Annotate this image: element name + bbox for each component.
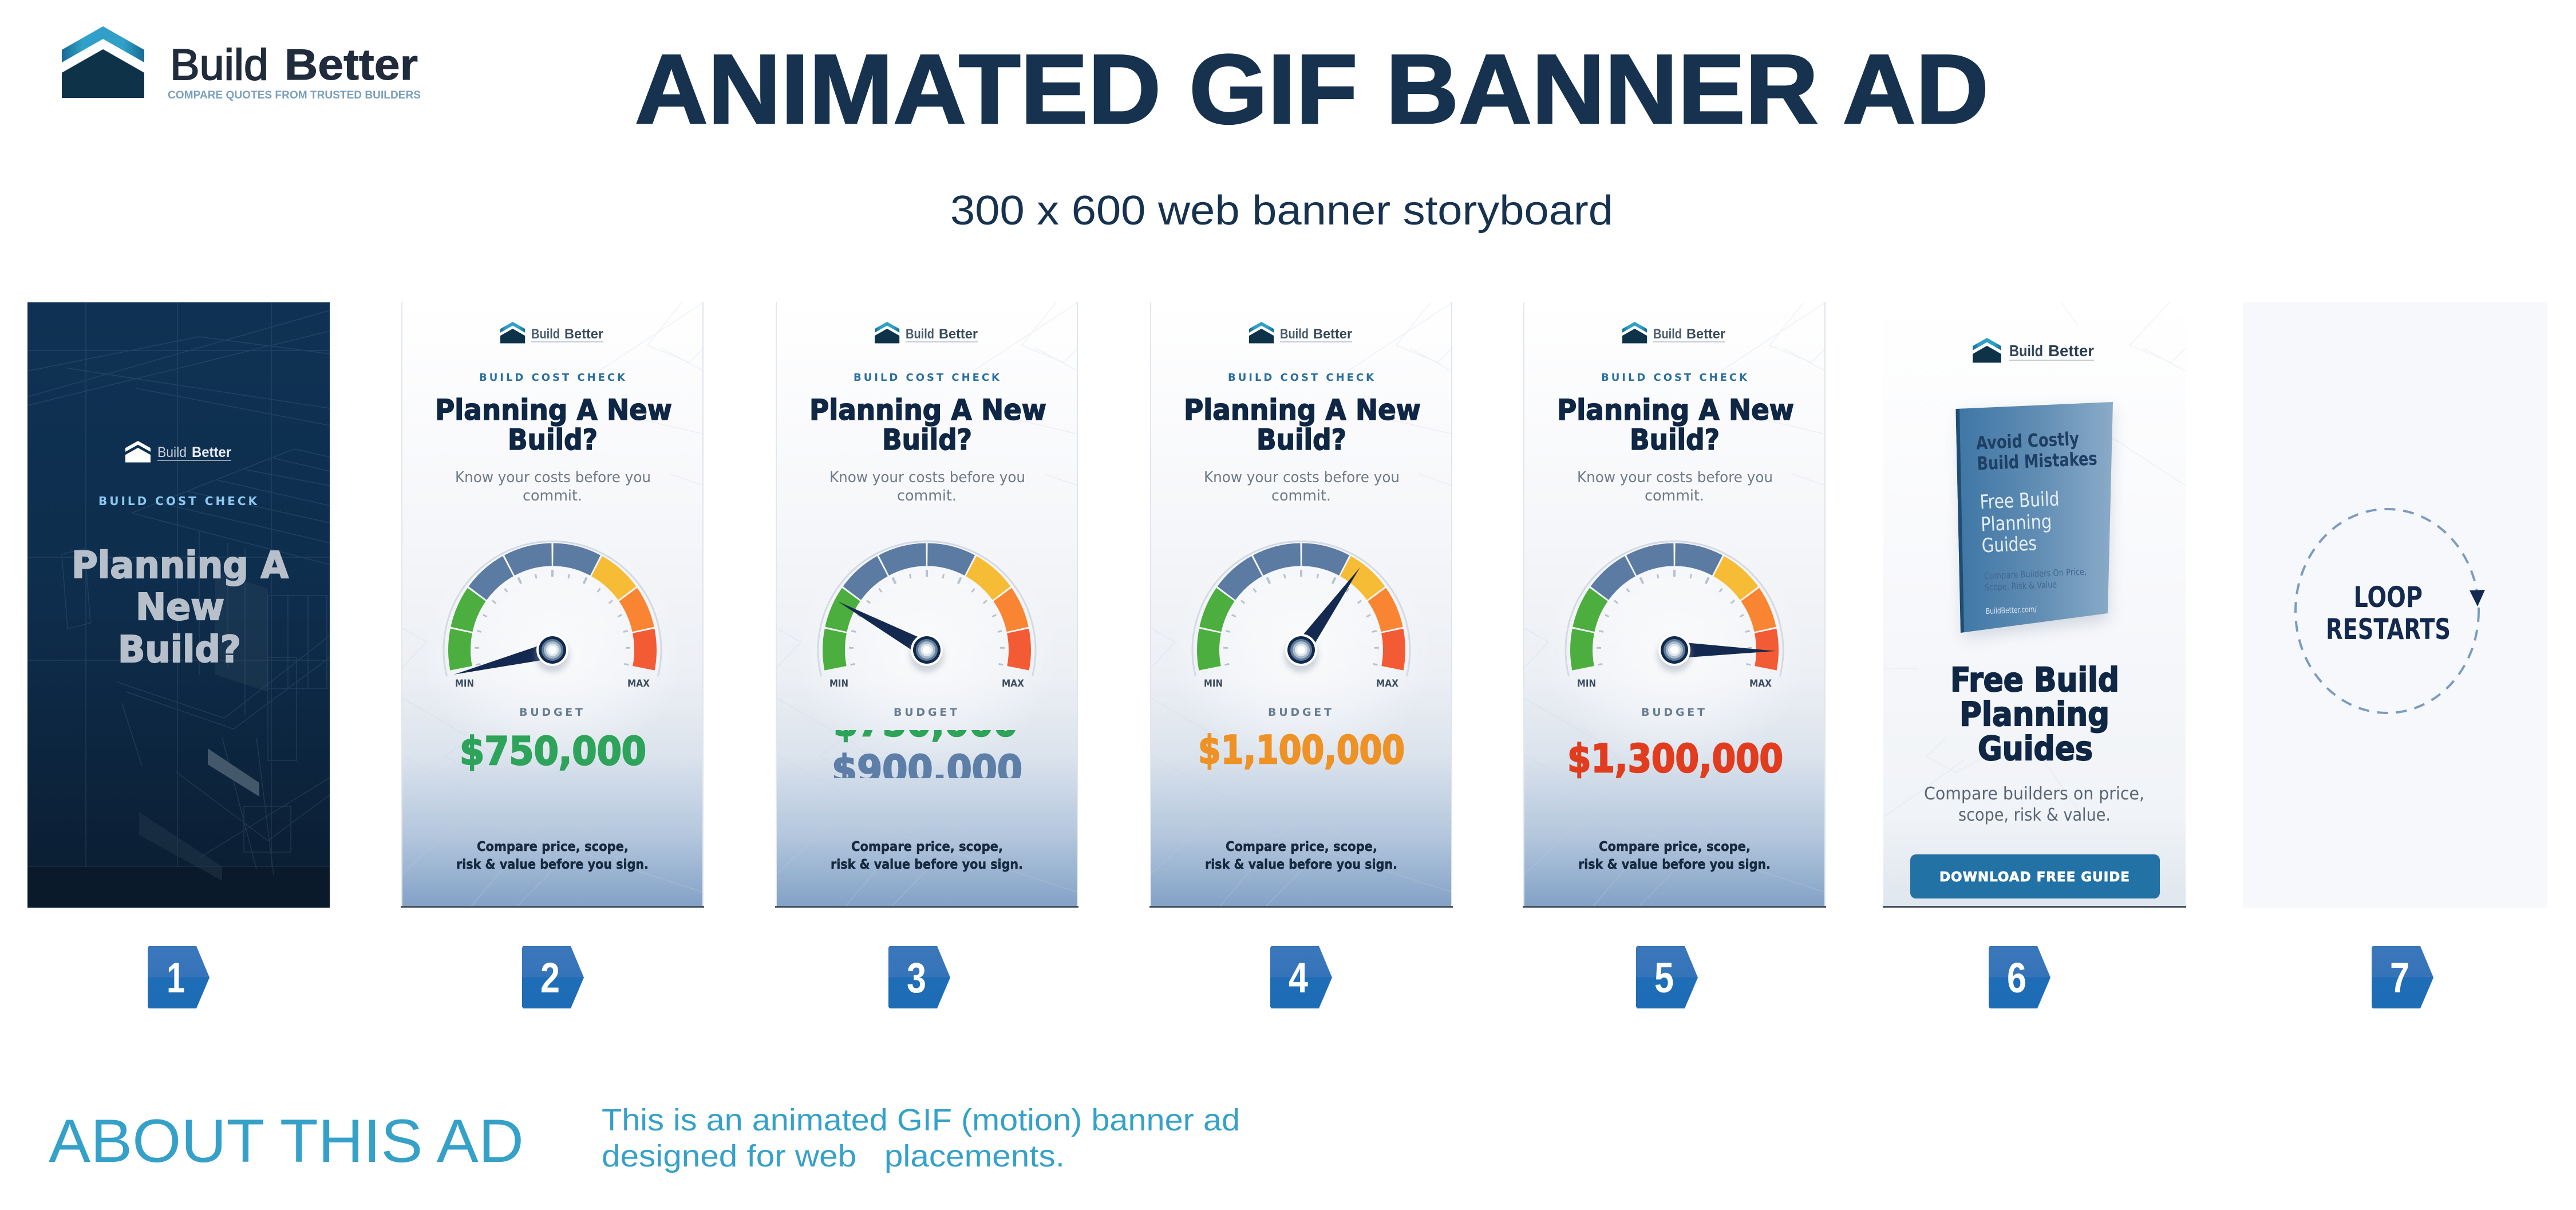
title: ANIMATED GIF BANNER AD [635,34,1989,144]
logo: Build [1280,326,1309,342]
gauge: MIN [1577,678,1596,689]
panel background [775,302,1078,908]
logo wordmark: Better [285,41,418,89]
logo [1622,322,1725,344]
subhead [455,469,651,505]
logo: Build Better [62,26,421,101]
about heading: ABOUT THIS AD [49,1106,524,1175]
footer copy [831,839,1023,872]
panel 7: loop restarts [2243,302,2547,908]
panel 6: free guides call to action [1883,302,2186,908]
footer copy: risk & value before you sign. [1578,857,1771,872]
logo [1249,322,1352,344]
headline: Planning A New [435,393,672,427]
logo: Better [1313,326,1352,342]
headline [1184,393,1421,456]
headline: Build? [118,629,241,671]
book: planning guide: Build Mistakes [1977,448,2097,475]
panel 5: gauge at $1,300,000 [1523,302,1826,908]
book: planning guide: BuildBetter.com/ [1986,605,2037,616]
button: download free guide: DOWNLOAD FREE GUIDE [1939,870,2129,885]
logo [875,322,978,344]
footer copy: Compare price, scope, [851,839,1003,854]
gauge [818,541,1036,689]
headline [809,393,1046,456]
headline: Free Build [1950,660,2119,699]
logo: white: Build [157,444,187,460]
step badge 3: 3 [907,954,926,1002]
step badge 4: 4 [1289,954,1308,1002]
logo [1973,338,2094,362]
step badge 2: 2 [540,954,560,1002]
headline: Planning A [72,545,289,587]
rolling budget values [833,730,1021,778]
headline: New [136,586,224,629]
headline: Planning A New [1557,393,1794,427]
panel background [2243,302,2547,908]
budget value: $750,000 [460,729,646,774]
budget value: $1,100,000 [1198,728,1405,773]
step badge 5: 5 [1654,954,1674,1002]
logo [500,322,603,344]
subhead [1924,784,2144,825]
panel background [401,302,704,908]
step badge 4 [1270,946,1332,1008]
subhead: Know your costs before you [1204,469,1400,486]
subhead: commit. [523,487,582,505]
subhead [1577,469,1773,505]
about description: This is an animated GIF (motion) banner ad [602,1103,1240,1137]
loop text: LOOP [2354,581,2423,614]
loop text [2326,581,2451,646]
panel 1: dark intro frame [27,302,330,908]
logo: Build [531,326,560,342]
headline: Build? [1257,423,1346,456]
logo: Better [2048,342,2094,360]
footer copy [456,839,649,872]
headline: Planning A New [1184,393,1421,427]
subhead: Know your costs before you [1577,469,1773,486]
subhead: commit. [1271,487,1331,505]
icon: house mark [62,26,144,98]
book: planning guide: Avoid Costly [1976,428,2080,454]
headline [72,545,289,671]
gauge: MAX [1002,678,1024,689]
logo: Better [939,326,978,342]
step badge 7 [2372,946,2433,1008]
panel background [1523,302,1826,908]
subhead [829,469,1025,505]
logo: white: Better [192,444,231,460]
logo: Better [564,326,603,342]
panel 3: gauge with rolling budget to $900,000 [775,302,1078,908]
logo wordmark: Build [170,41,268,89]
rolling budget values: $750,000 [833,700,1018,746]
footer copy: risk & value before you sign. [1205,857,1397,872]
gauge: MIN [455,678,474,689]
budget label: BUDGET [1268,706,1332,719]
step badge 7: 7 [2390,954,2409,1002]
logo tagline: COMPARE QUOTES FROM TRUSTED BUILDERS [168,89,421,101]
headline: Planning [1959,695,2109,734]
footer copy: Compare price, scope, [477,839,629,854]
button: download free guide [1910,854,2160,898]
headline [1557,393,1794,456]
headline [1950,660,2119,768]
subhead: Compare builders on price, [1924,784,2144,804]
footer copy: Compare price, scope, [1226,839,1377,854]
gauge: MIN [829,678,848,689]
step badge 1: 1 [167,954,185,1002]
book: planning guide: Free Build [1980,487,2060,514]
gauge [1192,541,1410,689]
panel 2: gauge at $750,000 [401,302,704,908]
logo wordmark [170,41,418,89]
eyebrow: BUILD COST CHECK [98,494,258,508]
rolling budget values: $900,000 [832,747,1022,793]
footer copy: risk & value before you sign. [831,857,1023,872]
budget label: BUDGET [519,706,583,719]
gauge [444,541,661,689]
about description: designed for web placements. [602,1139,1065,1173]
step badge 5 [1636,946,1698,1008]
gauge: MAX [1749,678,1772,689]
loop text: RESTARTS [2326,613,2451,646]
subhead: commit. [897,487,957,505]
footer copy: Compare price, scope, [1599,839,1751,854]
subhead: Know your costs before you [829,469,1025,486]
dashed loop circle [2296,509,2479,713]
gauge: MAX [627,678,650,689]
panel background [1149,302,1453,908]
headline: Planning A New [809,393,1046,427]
panel 4: gauge at $1,100,000 [1149,302,1453,908]
budget label: BUDGET [1641,706,1705,719]
budget label: BUDGET [894,706,957,719]
logo: Better [1686,326,1725,342]
headline: Guides [1978,729,2093,768]
step badge 6 [1989,946,2050,1008]
logo: Build [906,326,934,342]
book: planning guide: Scope, Risk & Value [1985,579,2057,593]
eyebrow: BUILD COST CHECK [854,372,1000,384]
step badge 1 [148,946,210,1008]
gauge: MAX [1376,678,1398,689]
headline [435,393,672,456]
headline: Build? [882,423,972,456]
budget value: $1,300,000 [1567,736,1783,782]
subhead [1204,469,1400,505]
footer copy: risk & value before you sign. [456,857,649,872]
gauge [1566,541,1783,689]
subtitle: 300 x 600 web banner storyboard [950,188,1613,234]
book: planning guide [1955,402,2113,637]
eyebrow: BUILD COST CHECK [1601,372,1748,384]
book: planning guide: Compare Builders On Price, [1984,566,2087,581]
logo: white [125,441,231,463]
logo: Build [2009,342,2043,360]
footer copy [1578,839,1771,872]
logo: Build [1653,326,1682,342]
step badge 2 [522,946,584,1008]
subhead: scope, risk & value. [1958,805,2111,825]
arrow head [2470,590,2485,606]
gauge: MIN [1204,678,1223,689]
book: planning guide: Planning [1980,510,2052,536]
footer copy [1205,839,1397,872]
eyebrow: BUILD COST CHECK [1228,372,1374,384]
eyebrow: BUILD COST CHECK [479,372,626,384]
about description [602,1103,1240,1173]
step badge 6: 6 [2007,954,2026,1002]
step badge 3 [888,946,950,1008]
subhead: Know your costs before you [455,469,651,486]
headline: Build? [1630,423,1720,456]
headline: Build? [508,423,598,456]
subhead: commit. [1645,487,1704,505]
book: planning guide: Guides [1981,532,2037,557]
panel background [1883,302,2186,908]
